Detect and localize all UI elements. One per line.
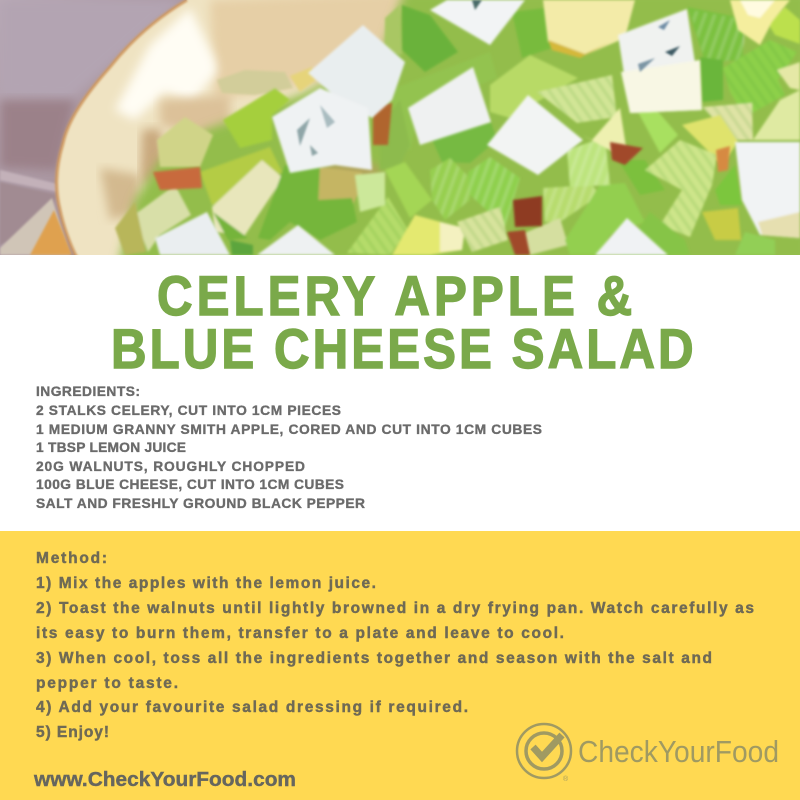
bottom centre [430,158,470,220]
blue cheese veining [297,0,680,156]
method steps [36,550,754,741]
method steps: pepper to taste. [36,675,178,692]
ingredients list: 2 STALKS CELERY, CUT INTO 1CM PIECES [36,403,341,418]
icon: check mark in circles [517,724,571,778]
ingredients list: 1 TBSP LEMON JUICE [36,440,186,455]
ingredients list: 100G BLUE CHEESE, CUT INTO 1CM CUBES [36,477,344,492]
apple chunks [543,0,790,58]
registered mark: ® [563,775,569,783]
method steps: 4) Add your favourite salad dressing if required. [36,699,468,716]
website url: www.CheckYourFood.com [33,768,296,791]
ingredients list: 1 MEDIUM GRANNY SMITH APPLE, CORED AND CUT INTO 1CM CUBES [36,422,542,437]
left side [223,88,290,148]
ingredients list [36,384,542,511]
method steps: 5) Enjoy! [36,724,109,741]
photo: celery, apple and blue cheese salad in a wooden bowl [0,0,800,265]
ingredients list: INGREDIENTS: [36,384,140,399]
method steps: its easy to burn them, transfer to a plate and leave to cool. [36,625,564,642]
blue cheese cubes [155,0,800,255]
logo wordmark: CheckYourFood [578,734,779,769]
title: CELERY APPLE & [157,265,632,328]
panel: method background [0,531,800,800]
walnuts [153,103,730,255]
bowl [54,0,408,255]
method steps: 1) Mix the apples with the lemon juice. [36,575,376,592]
ingredients list: 20G WALNUTS, ROUGHLY CHOPPED [36,459,305,474]
ingredients list: SALT AND FRESHLY GROUND BLACK PEPPER [36,496,365,511]
top row [385,5,402,55]
celery and apple pieces [115,5,800,255]
method steps: Method: [36,550,107,567]
table background [0,0,200,255]
method steps: 3) When cool, toss all the ingredients together and season with the salt and [36,650,712,667]
green band behind cheese [385,52,497,150]
salad base [118,0,800,265]
logo: CheckYourFood [517,724,779,783]
title: BLUE CHEESE SALAD [111,318,694,381]
method steps: 2) Toast the walnuts until lightly browned in a dry frying pan. Watch carefully as [36,600,754,617]
title [111,265,694,381]
